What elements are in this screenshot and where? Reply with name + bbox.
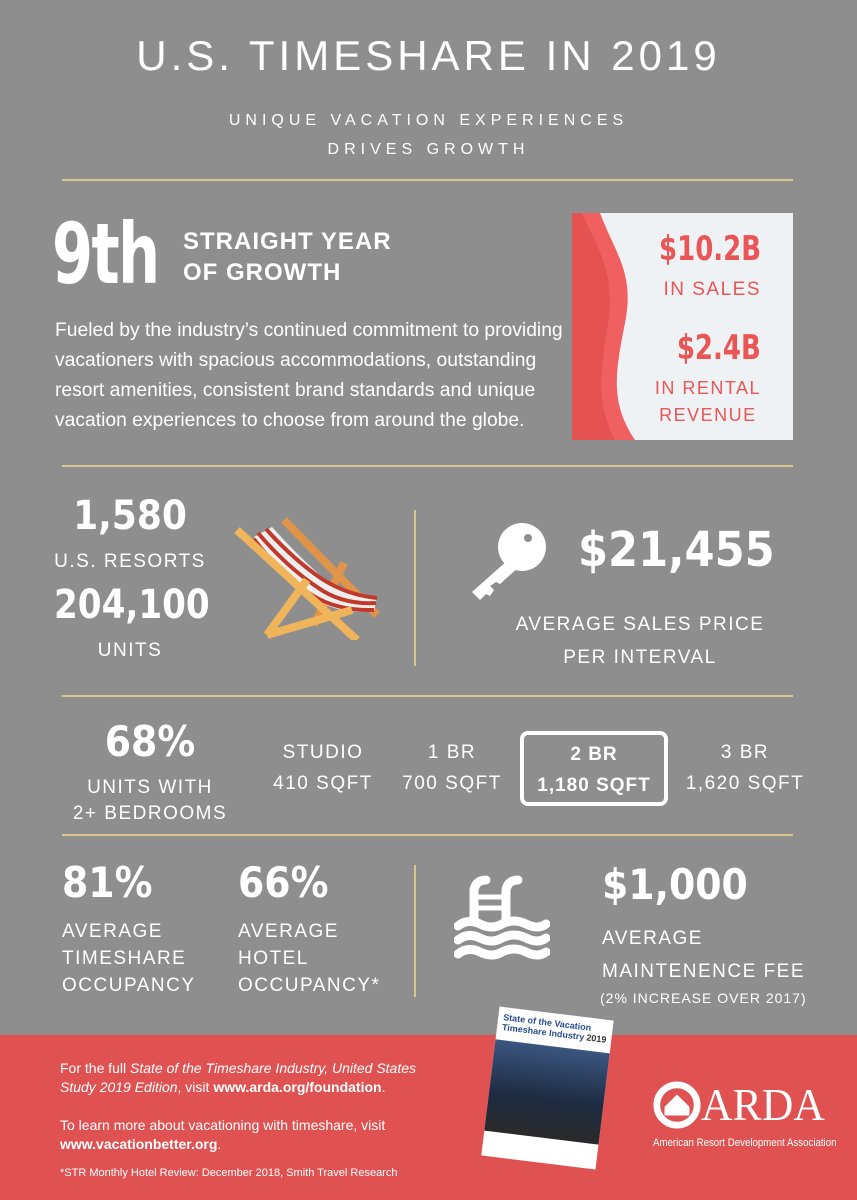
logo: ARDA: ARDA	[701, 1079, 825, 1130]
81%: OCCUPANCY	[62, 975, 196, 996]
81%: 81%	[62, 858, 152, 907]
resorts stats: U.S. RESORTS	[54, 551, 206, 572]
maintenance fee: AVERAGE	[602, 928, 703, 949]
in rental revenue: REVENUE	[659, 405, 757, 425]
fee note: (2% INCREASE OVER 2017)	[600, 990, 807, 1006]
sales price label	[516, 614, 764, 668]
resorts stats	[54, 493, 210, 661]
maintenance fee: $1,000	[602, 860, 748, 909]
report cover: 2019	[586, 1032, 607, 1045]
footer text: To learn more about vacationing with timeshare, visit www.vacationbetter.org.	[60, 1117, 385, 1152]
$10.2B: $10.2B	[659, 229, 761, 269]
subtitle	[229, 112, 628, 158]
maintenance fee	[602, 860, 805, 982]
66%	[238, 858, 380, 996]
sales price: $21,455	[578, 522, 775, 578]
68%: 68%	[105, 717, 195, 766]
footer	[0, 1035, 857, 1200]
paragraph: Fueled by the industry’s continued commitment to providing vacationers with spacious accommodations, outstanding resort amenities, consistent brand standards and unique vacation experiences to choose from around the globe.	[55, 320, 563, 431]
in rental revenue	[655, 378, 761, 425]
68%: UNITS WITH	[87, 777, 213, 798]
maintenance fee: MAINTENENCE FEE	[602, 961, 805, 982]
81%: TIMESHARE	[62, 948, 186, 969]
$2.4B: $2.4B	[677, 328, 761, 368]
81%	[62, 858, 196, 996]
highlighted 2 BR: 2 BR	[570, 744, 618, 765]
report cover	[481, 1007, 614, 1169]
resorts stats: 1,580	[73, 493, 187, 539]
straight year of growth	[183, 228, 392, 286]
68%: 2+ BEDROOMS	[73, 803, 227, 824]
footer text	[60, 1060, 416, 1152]
text: 3 BR	[721, 742, 769, 763]
unit sizes: 410 SQFT	[273, 773, 373, 794]
66%: OCCUPANCY*	[238, 975, 380, 996]
9th heading: 9th	[52, 205, 158, 303]
title: U.S. TIMESHARE IN 2019	[136, 32, 721, 79]
in sales: IN SALES	[663, 279, 761, 300]
unit sizes	[273, 742, 373, 794]
wave	[570, 213, 635, 440]
subtitle: UNIQUE VACATION EXPERIENCES	[229, 112, 628, 129]
straight year of growth: STRAIGHT YEAR	[183, 228, 392, 255]
sales price label: PER INTERVAL	[563, 647, 717, 668]
icon: key	[472, 523, 546, 600]
resorts stats: UNITS	[98, 640, 162, 661]
resorts stats: 204,100	[54, 582, 210, 628]
in rental revenue: IN RENTAL	[655, 378, 761, 398]
66%: 66%	[238, 858, 328, 907]
sales price label: AVERAGE SALES PRICE	[516, 614, 764, 635]
68%	[73, 717, 227, 824]
66%: AVERAGE	[238, 921, 339, 942]
footer text: For the full State of the Timeshare Industry, United States Study 2019 Edition, visit www.arda.org/foundation.	[60, 1060, 416, 1095]
logo: ARDA	[653, 1079, 836, 1149]
straight year of growth: OF GROWTH	[183, 259, 341, 286]
66%: HOTEL	[238, 948, 309, 969]
text: 700 SQFT	[402, 773, 502, 794]
text: 1 BR	[428, 742, 476, 763]
icon: beach chair	[234, 517, 380, 640]
highlighted 2 BR: 1,180 SQFT	[537, 775, 651, 796]
panel: sales	[570, 213, 793, 440]
highlighted 2 BR	[520, 731, 668, 806]
text: 1,620 SQFT	[686, 773, 804, 794]
unit sizes: STUDIO	[283, 742, 363, 763]
81%: AVERAGE	[62, 921, 163, 942]
subtitle: DRIVES GROWTH	[328, 141, 529, 158]
logo: ARDA: American Resort Development Association	[653, 1137, 836, 1149]
icon: pool	[454, 876, 550, 960]
footnote: *STR Monthly Hotel Review: December 2018, Smith Travel Research	[60, 1167, 397, 1179]
report cover: State of the Vacation Timeshare Industry	[501, 1012, 592, 1042]
